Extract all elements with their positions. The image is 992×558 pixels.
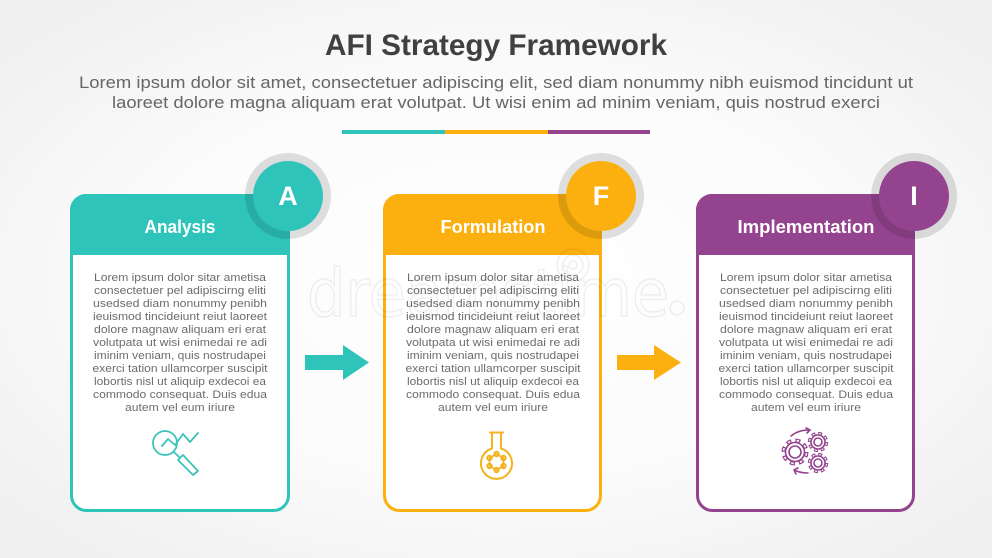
- tricolor divider: [342, 130, 650, 134]
- body text: exerci tation ullamcorper suscipit: [92, 363, 268, 375]
- body text: commodo consequat. Duis edua: [406, 389, 581, 401]
- card outline: [698, 196, 914, 510]
- card outline: [384, 196, 600, 510]
- card header: [696, 194, 915, 255]
- body text: consectetuer pel adipiscirng eliti: [720, 285, 892, 297]
- body text: dolore magnaw aliquam eri erat: [720, 324, 892, 336]
- body text: consectetuer pel adipiscirng eliti: [94, 285, 266, 297]
- panel: Implementation: [696, 153, 957, 510]
- card header: [383, 194, 602, 255]
- body text: exerci tation ullamcorper suscipit: [406, 363, 580, 375]
- body text: lobortis nisl ut aliquip exdecoi ea: [407, 376, 580, 388]
- body text: autem vel eum iriure: [125, 402, 235, 414]
- body text: volutpata ut wisi enimedai re adi: [406, 337, 580, 349]
- body text: autem vel eum iriure: [751, 402, 861, 414]
- heading: Implementation: [738, 216, 874, 237]
- badge halo: [245, 153, 331, 239]
- icon: gears with arrows: [784, 428, 826, 474]
- body text: [718, 272, 894, 414]
- panel: Formulation: [383, 153, 644, 510]
- body text: usedsed diam nonummy penibh: [719, 298, 893, 310]
- body text: consectetuer pel adipiscirng eliti: [407, 285, 579, 297]
- arrow: analysis to formulation: [305, 345, 369, 380]
- body text: autem vel eum iriure: [438, 402, 548, 414]
- body text: iminim veniam, quis nostrudapei: [720, 350, 892, 362]
- body text: dolore magnaw aliquam eri erat: [407, 324, 579, 336]
- body text: usedsed diam nonummy penibh: [406, 298, 580, 310]
- body text: Lorem ipsum dolor sitar ametisa: [407, 272, 580, 284]
- body text: Lorem ipsum dolor sitar ametisa: [94, 272, 267, 284]
- card header: [70, 194, 290, 255]
- body text: commodo consequat. Duis edua: [93, 389, 268, 401]
- body text: iminim veniam, quis nostrudapei: [407, 350, 579, 362]
- subtitle: laoreet dolore magna aliquam erat volutpat. Ut wisi enim ad minim veniam, quis nostrud exerci: [112, 93, 880, 112]
- body text: Lorem ipsum dolor sitar ametisa: [720, 272, 893, 284]
- body text: exerci tation ullamcorper suscipit: [718, 363, 894, 375]
- badge: [879, 161, 949, 231]
- icon: flask with molecule: [481, 432, 512, 479]
- heading: Analysis: [144, 216, 216, 237]
- icon: magnifier with chart: [153, 431, 198, 475]
- body text: ieuismod tincideiunt reiut laoreet: [406, 311, 580, 323]
- title: AFI Strategy Framework: [325, 29, 667, 62]
- badge letter: I: [910, 181, 918, 211]
- body text: [406, 272, 581, 414]
- badge: [253, 161, 323, 231]
- watermark: dreamstime: [307, 255, 669, 332]
- badge halo: [558, 153, 644, 239]
- body text: volutpata ut wisi enimedai re adi: [719, 337, 893, 349]
- subtitle: [79, 73, 913, 112]
- badge letter: F: [593, 181, 609, 211]
- body text: volutpata ut wisi enimedai re adi: [93, 337, 267, 349]
- badge letter: A: [278, 181, 298, 211]
- card outline: [72, 196, 288, 510]
- panel: Analysis: [70, 153, 331, 510]
- body text: lobortis nisl ut aliquip exdecoi ea: [720, 376, 893, 388]
- subtitle: Lorem ipsum dolor sit amet, consectetuer adipiscing elit, sed diam nonummy nibh euismod tincidunt ut: [79, 73, 913, 92]
- body text: [92, 272, 268, 414]
- body text: ieuismod tincideiunt reiut laoreet: [719, 311, 893, 323]
- arrow: formulation to implementation: [617, 345, 681, 380]
- badge halo: [871, 153, 957, 239]
- body text: lobortis nisl ut aliquip exdecoi ea: [94, 376, 267, 388]
- badge: [566, 161, 636, 231]
- body text: usedsed diam nonummy penibh: [93, 298, 267, 310]
- body text: commodo consequat. Duis edua: [719, 389, 894, 401]
- body text: dolore magnaw aliquam eri erat: [94, 324, 266, 336]
- body text: ieuismod tincideiunt reiut laoreet: [93, 311, 267, 323]
- heading: Formulation: [440, 216, 546, 237]
- body text: iminim veniam, quis nostrudapei: [94, 350, 266, 362]
